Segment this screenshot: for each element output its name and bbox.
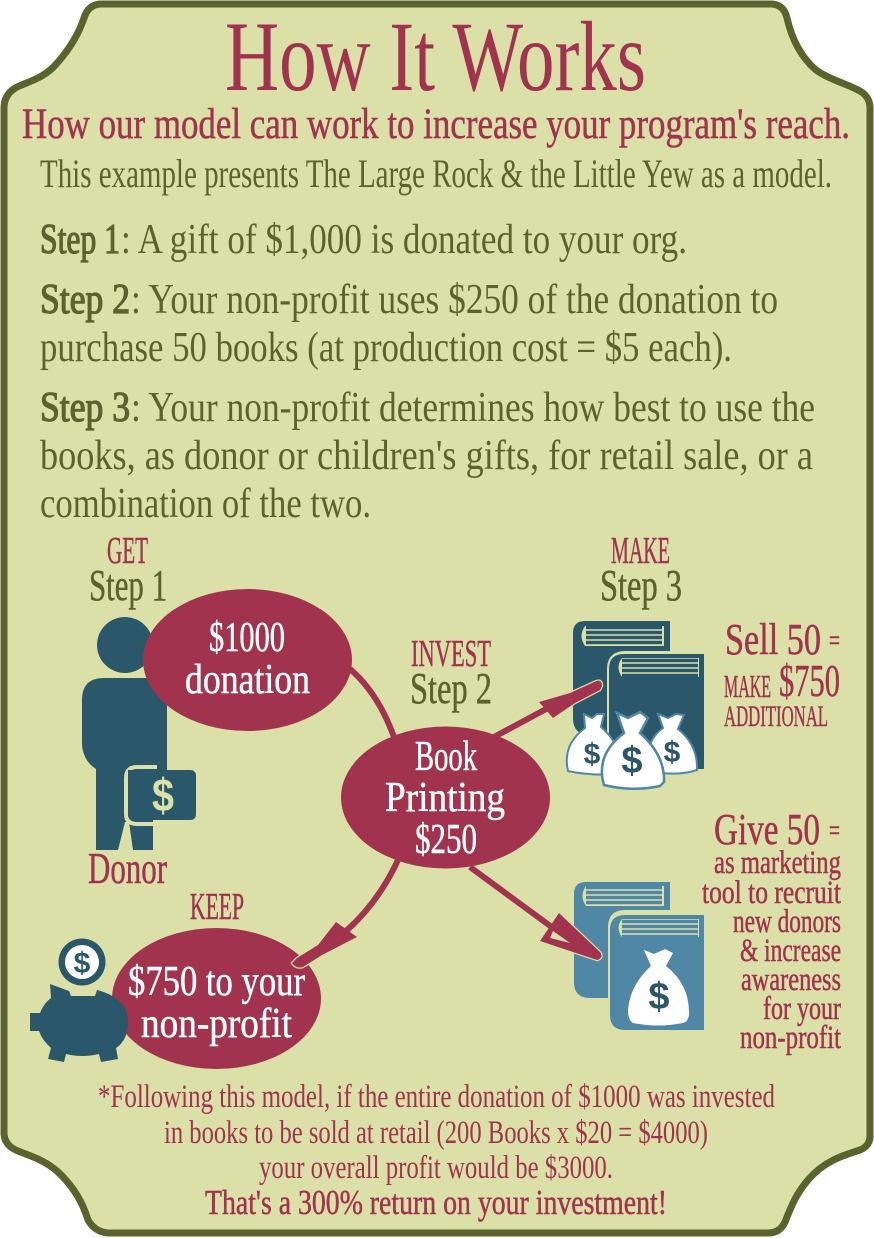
label: get step 1: Step 1 (89, 561, 167, 610)
footnote (98, 1079, 775, 1222)
icon: light books with money bag: $ (648, 976, 670, 1018)
icon: dark books with money bags (567, 621, 705, 789)
label: get step 1 (89, 530, 167, 610)
footnote: your overall profit would be $3000. (259, 1150, 613, 1186)
callout: sell 50: = (829, 624, 840, 657)
label: invest step 2: Step 2 (410, 664, 492, 713)
oval: 1000 donation (143, 589, 352, 731)
icon: dark books with money bags: $ (584, 738, 601, 771)
step 3 text: combination of the two. (40, 481, 371, 527)
label: make step 3: Step 3 (600, 561, 682, 610)
callout: give 50: for your (763, 991, 841, 1027)
callout: give 50: Give 50 (714, 805, 820, 854)
step 2 text: purchase 50 books (at production cost = $5 each). (40, 325, 732, 371)
step 2 text: Step 2 (40, 277, 130, 323)
oval: 1000 donation: $1000 (209, 615, 285, 661)
callout: give 50: non-profit (740, 1020, 841, 1056)
callout: sell 50 (724, 615, 840, 733)
callout: sell 50: Sell 50 (725, 615, 821, 664)
icon: light books with money bag (574, 882, 705, 1031)
oval: 1000 donation: donation (185, 657, 310, 703)
oval: book printing: Book (415, 734, 477, 780)
oval: book printing: Printing (385, 775, 505, 821)
icon: piggy bank with coin (30, 938, 128, 1062)
step 2 text (40, 277, 778, 371)
label: invest step 2: INVEST (411, 633, 491, 675)
label: keep: KEEP (190, 886, 244, 928)
arrow: donation to printing (350, 669, 394, 737)
icon: dark books with money bags: $ (621, 740, 643, 782)
callout: give 50: = (829, 814, 840, 847)
callout: give 50 (702, 805, 841, 1056)
footnote: That's a 300% return on your investment! (205, 1183, 667, 1222)
icon: donor with briefcase (82, 617, 196, 850)
label: get step 1: GET (107, 530, 148, 572)
callout: give 50: awareness (741, 962, 841, 998)
step 1 text: Step 1 (40, 217, 120, 263)
footnote: in books to be sold at retail (200 Books x $20 = $4000) (164, 1115, 708, 1151)
oval: book printing: $250 (415, 817, 477, 863)
step 3 text: Step 3 (40, 385, 130, 431)
label: make step 3 (600, 530, 682, 610)
label: invest step 2 (410, 633, 492, 713)
oval: 750 to your non-profit: $750 to your (128, 959, 305, 1005)
title: How It Works (225, 1, 646, 112)
label: make step 3: MAKE (611, 530, 670, 572)
oval: book printing (341, 726, 550, 868)
label: donor: Donor (88, 844, 167, 893)
arrow: printing to keep (292, 860, 398, 968)
icon: donor with briefcase: $ (152, 769, 174, 821)
oval: 750 to your non-profit: non-profit (141, 1001, 292, 1047)
oval: 750 to your non-profit (112, 928, 321, 1069)
icon: piggy bank with coin: $ (74, 947, 91, 980)
step 3 text (40, 385, 815, 527)
step 1 text: : A gift of $1,000 is donated to your org. (121, 217, 687, 263)
arrow: printing to sell (494, 681, 602, 737)
callout: sell 50: $750 (779, 655, 840, 706)
arrow: printing to give (470, 867, 601, 960)
icon: dark books with money bags: $ (664, 736, 681, 769)
callout: sell 50: MAKE (724, 668, 771, 704)
